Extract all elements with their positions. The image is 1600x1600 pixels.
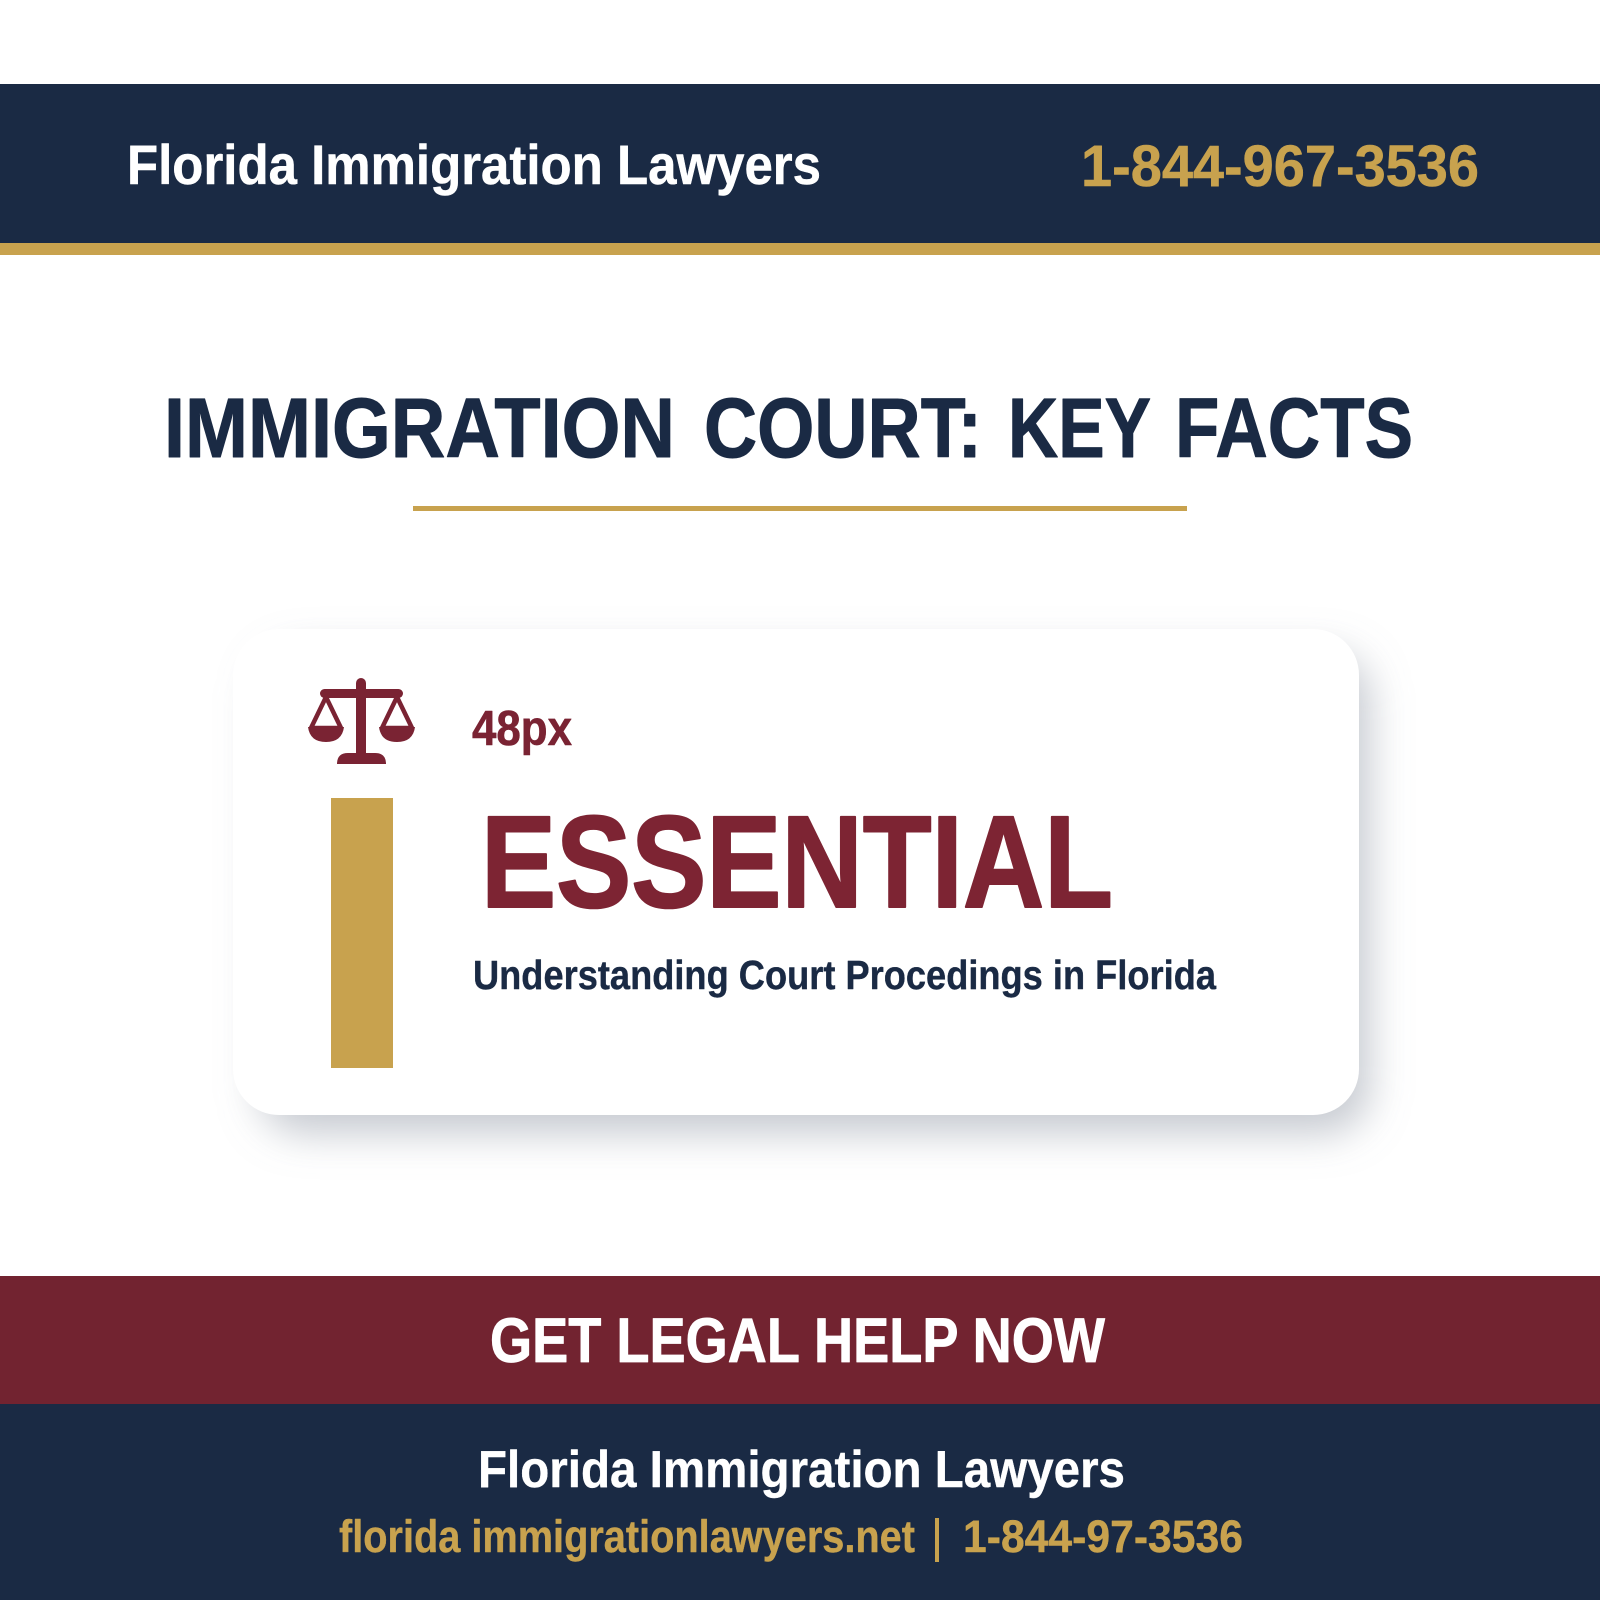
panel: fact card xyxy=(233,629,1370,1134)
call to action band xyxy=(0,1276,1600,1404)
footer phone number: 1-844-97-3536 xyxy=(963,1511,1243,1562)
call to action text: GET LEGAL HELP NOW xyxy=(490,1306,1105,1376)
headline word: ESSENTIAL xyxy=(481,788,1113,935)
footer firm name: Florida Immigration Lawyers xyxy=(478,1441,1125,1499)
card surface xyxy=(233,629,1359,1115)
title: FACTS xyxy=(1175,381,1413,475)
gold vertical bar xyxy=(331,798,393,1068)
title: KEY xyxy=(1008,381,1151,475)
header firm name: Florida Immigration Lawyers xyxy=(127,133,821,196)
card subtitle: Understanding Court Procedings in Florida xyxy=(473,952,1217,998)
title: IMMIGRATION xyxy=(164,381,675,475)
footer website: florida immigrationlawyers.net xyxy=(339,1511,915,1562)
title underline xyxy=(413,506,1187,511)
title: COURT: xyxy=(704,381,982,475)
title xyxy=(164,381,1413,475)
card shadow xyxy=(258,652,1370,1134)
header phone number: 1-844-967-3536 xyxy=(1081,134,1479,199)
header band xyxy=(0,84,1600,255)
footer separator xyxy=(935,1518,939,1562)
icon: scales of justice xyxy=(308,678,415,764)
size label: 48px xyxy=(472,702,572,756)
footer band xyxy=(0,1404,1600,1600)
